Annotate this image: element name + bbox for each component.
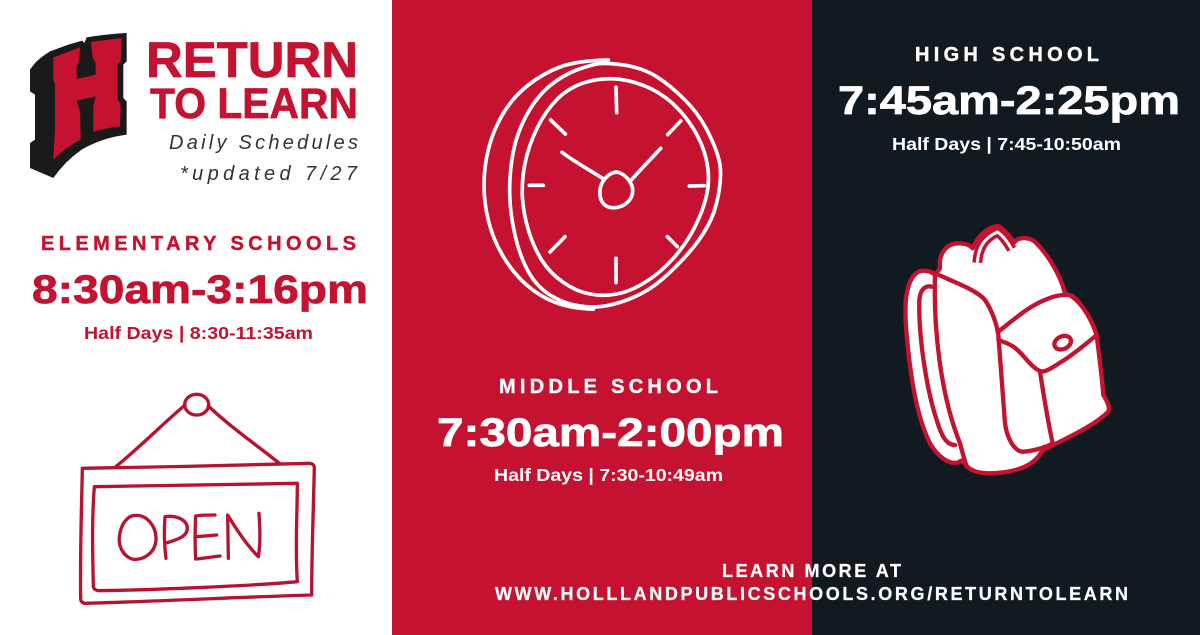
text block: elementary schools	[32, 233, 368, 343]
footer: learn more link: WWW.HOLLLANDPUBLICSCHOOLS.ORG/RETURNTOLEARN	[495, 584, 1128, 604]
panel: high school background	[812, 0, 1200, 635]
footer: learn more link	[495, 561, 1128, 604]
subheading: daily schedules: *updated 7/27	[180, 163, 358, 185]
text block: middle school: Half Days | 7:30-10:49am	[494, 465, 723, 485]
icon: backpack	[905, 226, 1109, 473]
subheading: daily schedules	[169, 132, 358, 185]
logo: block H	[30, 33, 127, 178]
text block: elementary schools: Half Days | 8:30-11:35am	[84, 323, 313, 343]
heading: return to learn	[146, 32, 358, 128]
panel: middle school background	[392, 0, 812, 635]
text block: high school: 7:45am-2:25pm	[838, 79, 1180, 123]
text block: high school: Half Days | 7:45-10:50am	[892, 134, 1121, 154]
text block: high school: HIGH SCHOOL	[915, 44, 1099, 66]
heading: return to learn: RETURN	[146, 32, 358, 88]
text block: high school	[838, 44, 1180, 154]
icon: open sign	[81, 394, 314, 603]
text block: middle school: 7:30am-2:00pm	[437, 411, 784, 455]
panel: elementary schools background	[0, 0, 392, 635]
footer: learn more link: LEARN MORE AT	[722, 561, 901, 581]
heading: return to learn: TO LEARN	[150, 80, 358, 128]
subheading: daily schedules: Daily Schedules	[169, 132, 358, 154]
icon: clock	[484, 60, 721, 309]
text block: middle school: MIDDLE SCHOOL	[499, 376, 718, 398]
text block: elementary schools: ELEMENTARY SCHOOLS	[41, 233, 356, 255]
text block: elementary schools: 8:30am-3:16pm	[32, 268, 368, 312]
text block: middle school	[437, 376, 784, 485]
